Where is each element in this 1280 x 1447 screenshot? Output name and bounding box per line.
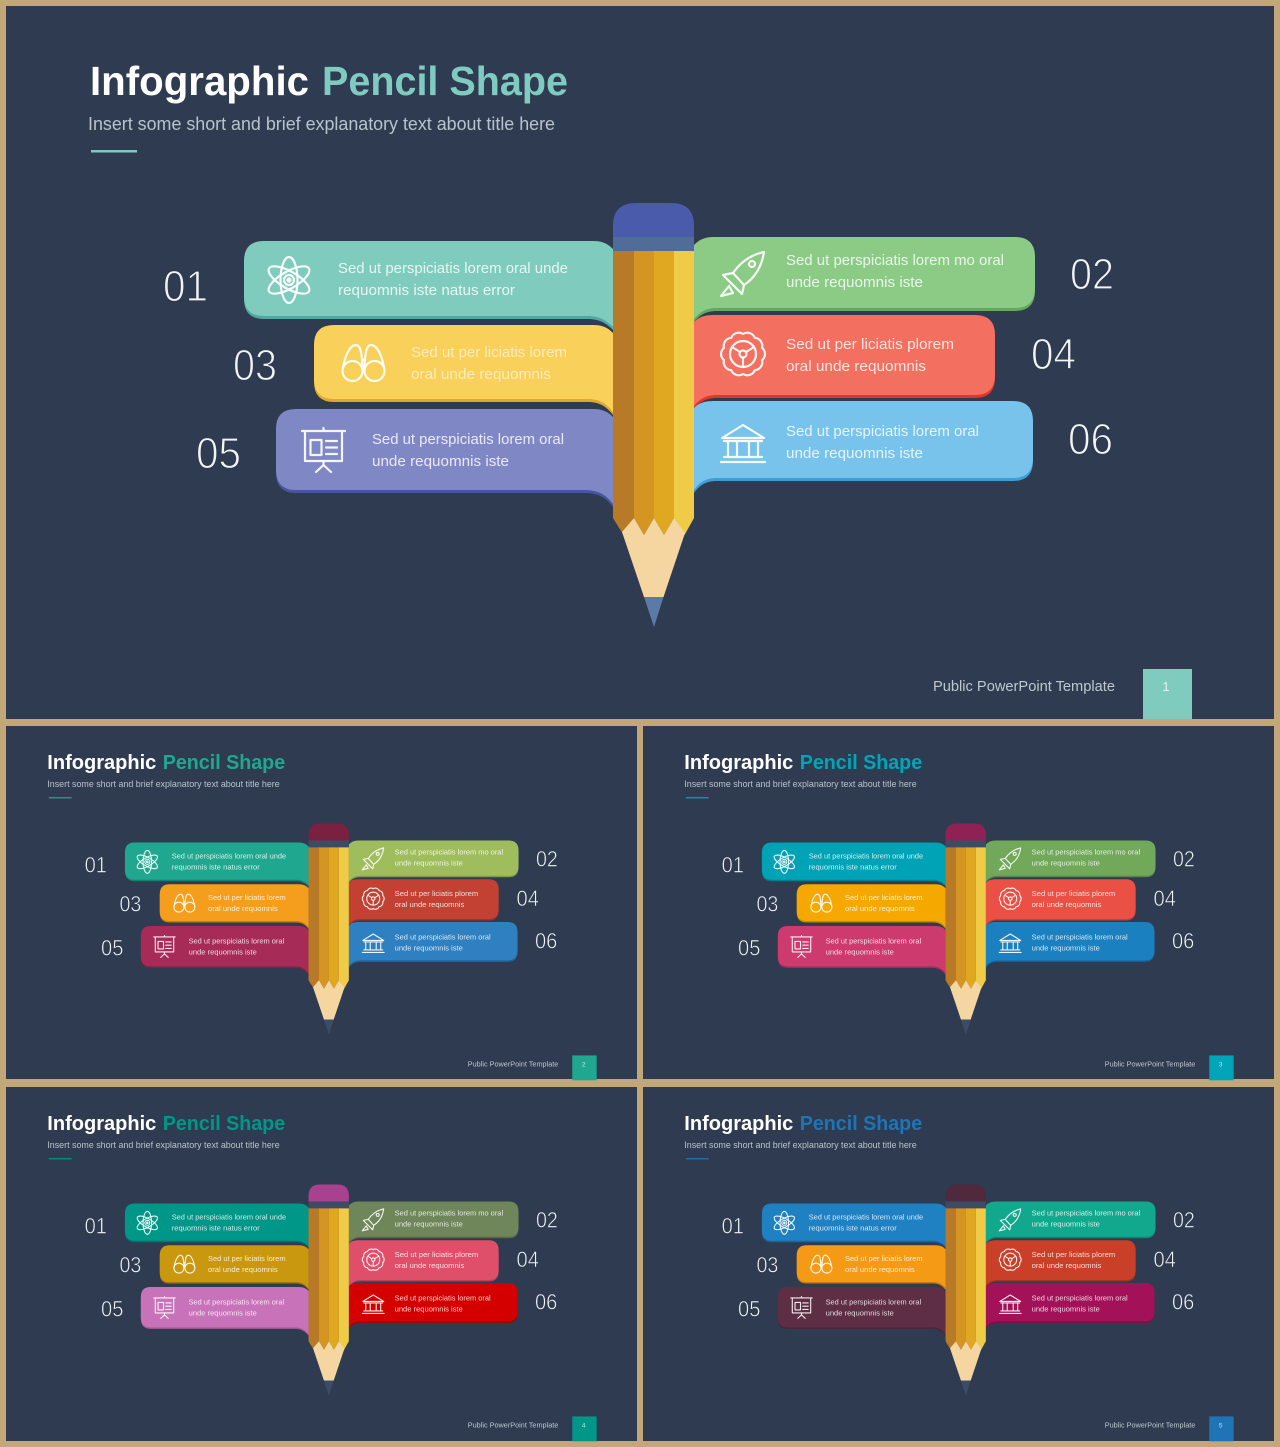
- slide 5 number 06: 06: [1172, 1289, 1194, 1314]
- slide 3 page number: 3: [1219, 1061, 1223, 1068]
- slide 1 number 06: 06: [1068, 415, 1113, 464]
- slide 3 banner 03: oral unde requomnis: [845, 904, 915, 913]
- slide 2 banner 02: unde requomnis iste: [395, 858, 463, 867]
- slide 4: [47, 1113, 597, 1441]
- slide 3 banner 04: [986, 879, 1136, 926]
- slide 2 banner 04: [349, 879, 499, 926]
- slide 4 banner 03: Sed ut per liciatis lorem: [208, 1254, 286, 1263]
- slide 4 number 04: 04: [517, 1247, 539, 1272]
- slide 2 banner 01: Sed ut perspiciatis lorem oral unde: [172, 851, 286, 860]
- slide 5 subtitle: Insert some short and brief explanatory text about title here: [684, 1140, 917, 1150]
- slide 3 page number: [1209, 1055, 1234, 1080]
- slide 3 banner 03: [797, 884, 946, 929]
- slide 4 banner 05: [141, 1287, 309, 1336]
- slide 1 number 01: 01: [163, 262, 208, 311]
- slide 1 accent line: [91, 150, 137, 152]
- slide 1 banner 04: Sed ut per liciatis plorem: [786, 336, 954, 353]
- slide 4 footer label: Public PowerPoint Template: [468, 1420, 558, 1429]
- slide 1 title: Pencil Shape: [322, 58, 568, 104]
- slide 1 banner 02: unde requomnis iste: [786, 274, 923, 291]
- slide 1 subtitle: Insert some short and brief explanatory text about title here: [88, 113, 555, 134]
- slide 2 title: Infographic: [47, 752, 156, 774]
- slide 5 banner 01: [762, 1203, 946, 1248]
- slide 1 banner 06: unde requomnis iste: [786, 445, 923, 462]
- slide 4 banner 06: [349, 1283, 518, 1329]
- slide 2 number 03: 03: [119, 892, 141, 917]
- slide 3 banner 01: requomnis iste natus error: [809, 862, 897, 871]
- slide 3 accent line: [686, 797, 709, 798]
- slide 2 page number: [572, 1055, 597, 1080]
- slide 5 accent line: [686, 1158, 709, 1159]
- slide 2 banner 06: unde requomnis iste: [395, 943, 463, 952]
- slide 4 banner 01: Sed ut perspiciatis lorem oral unde: [172, 1212, 286, 1221]
- slide 4 panel background: [6, 1087, 637, 1441]
- slide 2 number 06: 06: [535, 928, 557, 953]
- slide 2 banner 01: requomnis iste natus error: [172, 862, 260, 871]
- slide 1 banner 04: oral unde requomnis: [786, 358, 926, 375]
- slide 2 title: [47, 752, 285, 774]
- slide 3 banner 04: oral unde requomnis: [1032, 900, 1102, 909]
- slide 4 title: Infographic: [47, 1113, 156, 1135]
- slide 1 banner 05: Sed ut perspiciatis lorem oral: [372, 431, 564, 448]
- slide 2 title: Pencil Shape: [163, 752, 285, 774]
- slide 5 pencil: [946, 1185, 986, 1396]
- slide 1 banner 02: Sed ut perspiciatis lorem mo oral: [786, 252, 1004, 269]
- slide 2 accent line: [49, 797, 72, 798]
- slide 3 banner 01: Sed ut perspiciatis lorem oral unde: [809, 851, 923, 860]
- slide 1 page number: 1: [1162, 679, 1170, 694]
- slide 1 banner 01: [244, 241, 613, 330]
- slide 4 banner 03: oral unde requomnis: [208, 1265, 278, 1274]
- slide 2 banner 02: [349, 840, 519, 883]
- slide 2 banner 04: Sed ut per liciatis plorem: [395, 889, 478, 898]
- slide 1 banner 06: [694, 401, 1033, 493]
- slide 2 number 04: 04: [517, 886, 539, 911]
- slide 3 number 06: 06: [1172, 928, 1194, 953]
- slide 4 banner 04: [349, 1240, 499, 1287]
- slide 3 footer label: Public PowerPoint Template: [1105, 1059, 1195, 1068]
- slide 2 page number: 2: [582, 1061, 586, 1068]
- slide 2 banner 06: Sed ut perspiciatis lorem oral: [395, 932, 491, 941]
- slide 4 banner 01: [125, 1203, 309, 1248]
- slide 2 subtitle: Insert some short and brief explanatory text about title here: [47, 779, 280, 789]
- slide 5 banner 01: requomnis iste natus error: [809, 1223, 897, 1232]
- slide 2 banner 05: [141, 926, 309, 975]
- slide 5: [684, 1113, 1234, 1441]
- slide 5 banner 02: unde requomnis iste: [1032, 1219, 1100, 1228]
- slide 2 banner 06: [349, 922, 518, 968]
- slide 4 page number: [572, 1416, 597, 1441]
- slide 1 page number: [1143, 669, 1192, 719]
- slide 5 panel background: [643, 1087, 1274, 1441]
- slide 3 banner 05: [778, 926, 946, 975]
- slide 5 banner 03: oral unde requomnis: [845, 1265, 915, 1274]
- slide 3 banner 06: [986, 922, 1155, 968]
- slide 1 number 02: 02: [1070, 250, 1114, 299]
- slide 1 banner 05: unde requomnis iste: [372, 453, 509, 470]
- slide 3 panel background: [643, 726, 1274, 1079]
- slide 1 pencil: [613, 203, 694, 627]
- slide 3 banner 03: Sed ut per liciatis lorem: [845, 893, 923, 902]
- slide 1 banner 06: Sed ut perspiciatis lorem oral: [786, 423, 979, 440]
- slide 1 panel: [6, 6, 1274, 719]
- slide 5 number 05: 05: [738, 1296, 760, 1321]
- slide 5 number 04: 04: [1154, 1247, 1176, 1272]
- slide 5 number 01: 01: [722, 1213, 744, 1238]
- slide 1 banner 03: oral unde requomnis: [411, 366, 551, 383]
- slide 3 title: Pencil Shape: [800, 752, 922, 774]
- slide 4 pencil: [309, 1185, 349, 1396]
- slide 5 banner 06: [986, 1283, 1155, 1329]
- slide 2 banner 03: oral unde requomnis: [208, 904, 278, 913]
- slide 2 banner 04: oral unde requomnis: [395, 900, 465, 909]
- slide 2 number 05: 05: [101, 935, 123, 960]
- slide 1 title: [90, 58, 568, 104]
- slide 1 banner 03: [314, 325, 613, 415]
- slide 2 banner 05: Sed ut perspiciatis lorem oral: [189, 936, 285, 945]
- slide 2 footer label: Public PowerPoint Template: [468, 1059, 558, 1068]
- slide 3 number 01: 01: [722, 852, 744, 877]
- slide 4 banner 02: Sed ut perspiciatis lorem mo oral: [395, 1208, 503, 1217]
- slide 4 banner 05: Sed ut perspiciatis lorem oral: [189, 1297, 285, 1306]
- slide 3 number 05: 05: [738, 935, 760, 960]
- slide 4 banner 04: Sed ut per liciatis plorem: [395, 1250, 478, 1259]
- slide 2 banner 03: Sed ut per liciatis lorem: [208, 893, 286, 902]
- slide 3 banner 02: unde requomnis iste: [1032, 858, 1100, 867]
- slide 5 page number: [1209, 1416, 1234, 1441]
- slide 3 subtitle: Insert some short and brief explanatory text about title here: [684, 779, 917, 789]
- slide 5 page number: 5: [1219, 1422, 1223, 1429]
- slide 1 banner 03: Sed ut per liciatis lorem: [411, 344, 567, 361]
- slide 5 banner 04: oral unde requomnis: [1032, 1261, 1102, 1270]
- slide 4 number 03: 03: [119, 1253, 141, 1278]
- slide 1 banner 04: [694, 315, 995, 409]
- slide 3 banner 04: Sed ut per liciatis plorem: [1032, 889, 1115, 898]
- slide 5 title: Infographic: [684, 1113, 793, 1135]
- slide 2: [47, 752, 597, 1080]
- slide 5 banner 06: unde requomnis iste: [1032, 1304, 1100, 1313]
- slide 5 banner 03: Sed ut per liciatis lorem: [845, 1254, 923, 1263]
- slide 5 banner 05: unde requomnis iste: [826, 1308, 894, 1317]
- slide 3 banner 05: Sed ut perspiciatis lorem oral: [826, 936, 922, 945]
- slide 5 number 02: 02: [1173, 1207, 1195, 1232]
- slide 1 number 05: 05: [196, 429, 241, 478]
- slide 4 banner 02: [349, 1201, 519, 1244]
- slide 5 banner 06: Sed ut perspiciatis lorem oral: [1032, 1293, 1128, 1302]
- slide 1 number 04: 04: [1031, 330, 1076, 379]
- slide 4 title: Pencil Shape: [163, 1113, 285, 1135]
- slide 4 banner 02: unde requomnis iste: [395, 1219, 463, 1228]
- slide 5 banner 04: Sed ut per liciatis plorem: [1032, 1250, 1115, 1259]
- slide 2 banner 03: [160, 884, 309, 929]
- slide 5 banner 04: [986, 1240, 1136, 1287]
- slide 4 banner 06: Sed ut perspiciatis lorem oral: [395, 1293, 491, 1302]
- slide 4 page number: 4: [582, 1422, 586, 1429]
- slide 3 title: [684, 752, 922, 774]
- slide 5 title: [684, 1113, 922, 1135]
- slide 5 banner 05: Sed ut perspiciatis lorem oral: [826, 1297, 922, 1306]
- slide 4 banner 04: oral unde requomnis: [395, 1261, 465, 1270]
- slide 4 banner 05: unde requomnis iste: [189, 1308, 257, 1317]
- slide 3 banner 05: unde requomnis iste: [826, 947, 894, 956]
- slide 1 title: Infographic: [90, 58, 309, 104]
- slide 4 number 01: 01: [85, 1213, 107, 1238]
- slide 4 banner 06: unde requomnis iste: [395, 1304, 463, 1313]
- slide 3 banner 02: [986, 840, 1156, 883]
- slide 4 accent line: [49, 1158, 72, 1159]
- slide 5 banner 02: Sed ut perspiciatis lorem mo oral: [1032, 1208, 1140, 1217]
- slide 5 banner 05: [778, 1287, 946, 1336]
- slide 4 number 06: 06: [535, 1289, 557, 1314]
- slide 4 number 02: 02: [536, 1207, 558, 1232]
- slide 1 banner 01: Sed ut perspiciatis lorem oral unde: [338, 260, 568, 277]
- slide 2 number 02: 02: [536, 846, 558, 871]
- slide 3 number 04: 04: [1154, 886, 1176, 911]
- slide 2 banner 05: unde requomnis iste: [189, 947, 257, 956]
- slide 4 banner 03: [160, 1245, 309, 1290]
- slide 3 title: Infographic: [684, 752, 793, 774]
- slide 5 title: Pencil Shape: [800, 1113, 922, 1135]
- slide 1 number 03: 03: [233, 341, 277, 390]
- slide 1 footer label: Public PowerPoint Template: [933, 678, 1115, 695]
- slide 3 banner 02: Sed ut perspiciatis lorem mo oral: [1032, 847, 1140, 856]
- slide 5 banner 02: [986, 1201, 1156, 1244]
- slide 5 banner 03: [797, 1245, 946, 1290]
- slide 4 subtitle: Insert some short and brief explanatory text about title here: [47, 1140, 280, 1150]
- slide 3 pencil: [946, 824, 986, 1035]
- slide 2 banner 01: [125, 842, 309, 887]
- slide 4 banner 01: requomnis iste natus error: [172, 1223, 260, 1232]
- slide 3 banner 06: unde requomnis iste: [1032, 943, 1100, 952]
- slide 2 number 01: 01: [85, 852, 107, 877]
- slide 1 banner 05: [276, 409, 613, 507]
- slide 5 number 03: 03: [756, 1253, 778, 1278]
- slide 4 number 05: 05: [101, 1296, 123, 1321]
- slide 5 banner 01: Sed ut perspiciatis lorem oral unde: [809, 1212, 923, 1221]
- slide 5 footer label: Public PowerPoint Template: [1105, 1420, 1195, 1429]
- slide 3 number 02: 02: [1173, 846, 1195, 871]
- slide 2 panel background: [6, 726, 637, 1079]
- slide 3: [684, 752, 1234, 1080]
- slide 3 banner 06: Sed ut perspiciatis lorem oral: [1032, 932, 1128, 941]
- slide 3 number 03: 03: [756, 892, 778, 917]
- slide 4 title: [47, 1113, 285, 1135]
- slide 1 banner 01: requomnis iste natus error: [338, 282, 515, 299]
- slide 2 pencil: [309, 824, 349, 1035]
- slide 3 banner 01: [762, 842, 946, 887]
- slide 2 banner 02: Sed ut perspiciatis lorem mo oral: [395, 847, 503, 856]
- slide 1 banner 02: [694, 237, 1035, 322]
